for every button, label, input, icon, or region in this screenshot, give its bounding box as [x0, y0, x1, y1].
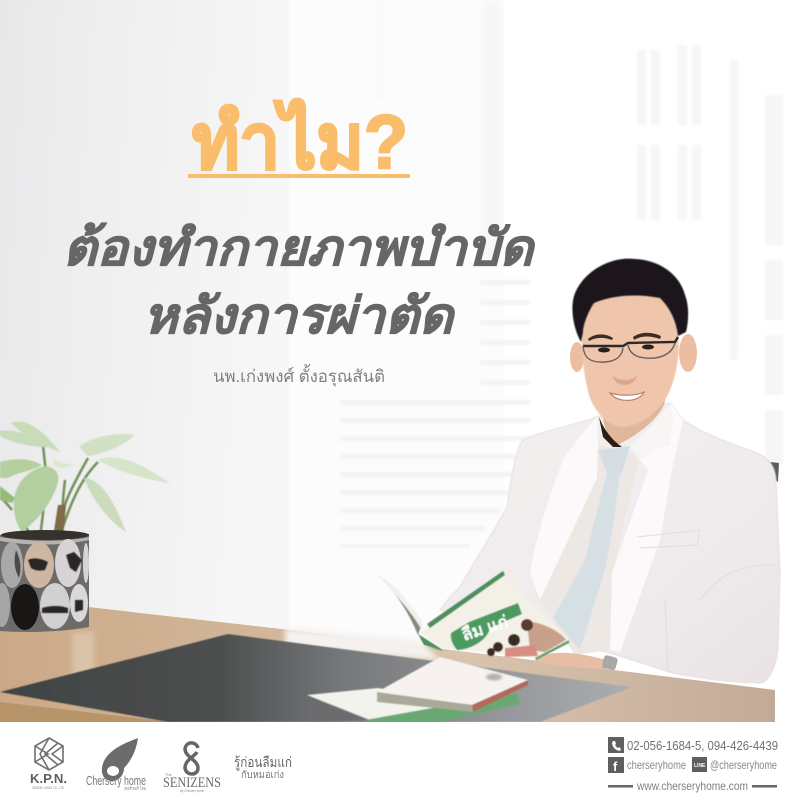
- logo: The Senizens: The: [165, 772, 173, 777]
- lower book: [307, 688, 470, 720]
- glasses: [583, 337, 678, 362]
- eyes: [598, 348, 610, 352]
- footer band: [0, 722, 800, 800]
- logo: รู้ก่อนลืมแก่: [234, 754, 292, 781]
- left page: [377, 575, 422, 635]
- open book: [377, 571, 569, 660]
- contact: website: www.cherseryhome.com: [636, 779, 748, 793]
- brows: [588, 333, 661, 341]
- ears: [570, 342, 584, 372]
- hair: [572, 259, 688, 342]
- lapels: [530, 417, 598, 600]
- logo: K.P.N.: SENIOR LIVING CO., LTD.: [32, 786, 65, 790]
- contact: facebook: [608, 757, 686, 774]
- upper book: [377, 657, 528, 705]
- byline: นพ.เก่งพงศ์ ตั้งอรุณสันติ: [213, 364, 385, 387]
- face: [582, 290, 679, 427]
- logo: K.P.N.: K.P.N.: [30, 771, 67, 786]
- suit: [440, 403, 780, 683]
- hand and watch: [535, 653, 606, 669]
- contact: facebook: cherseryhome: [627, 758, 686, 772]
- cover title: ลืม แก่: [459, 611, 511, 645]
- subtitle line 1: ต้องทำกายภาพบำบัด: [63, 220, 536, 276]
- logo: The Senizens: By Chersery home: [180, 789, 204, 793]
- logo: The Senizens: SENIZENS: [163, 775, 221, 791]
- logo: Chersery home: เชอร์เซอรี่ โฮม: [124, 785, 146, 791]
- contact: facebook: f: [613, 759, 618, 774]
- tie: [553, 446, 630, 650]
- logo: K.P.N.: [30, 738, 67, 790]
- stems: [0, 445, 98, 538]
- logo: Chersery home: Chersery home: [86, 773, 146, 788]
- logo: Chersery home: [86, 738, 146, 791]
- leaves: [0, 421, 170, 532]
- smile: [610, 392, 644, 400]
- cover: [420, 573, 569, 658]
- plant pot: [0, 530, 89, 632]
- contact: line: [692, 757, 777, 772]
- books on desk: [306, 657, 528, 722]
- plant: [0, 421, 170, 538]
- logo: รู้ก่อนลืมแก่: รู้ก่อนลืมแก่: [234, 754, 292, 771]
- family photo: [487, 619, 566, 657]
- doctor: [440, 259, 780, 683]
- contact: line: @cherseryhome: [710, 758, 777, 772]
- neck: [603, 395, 665, 446]
- contact: line: LINE: [694, 763, 706, 769]
- shirt: [540, 445, 640, 655]
- contact: phone: 02-056-1684-5, 094-426-4439: [627, 738, 778, 753]
- suit seams: [637, 530, 778, 672]
- logo: รู้ก่อนลืมแก่: กับหมอเก่ง: [241, 770, 284, 781]
- chair back: [770, 462, 779, 482]
- desk mat: [0, 634, 632, 722]
- desk: [0, 596, 775, 722]
- cover green label: [451, 603, 522, 650]
- title: ทำไม?: [192, 98, 408, 185]
- logo: The Senizens: [163, 743, 221, 793]
- nose: [612, 374, 638, 385]
- subtitle line 2: หลังการผ่าตัด: [143, 288, 456, 344]
